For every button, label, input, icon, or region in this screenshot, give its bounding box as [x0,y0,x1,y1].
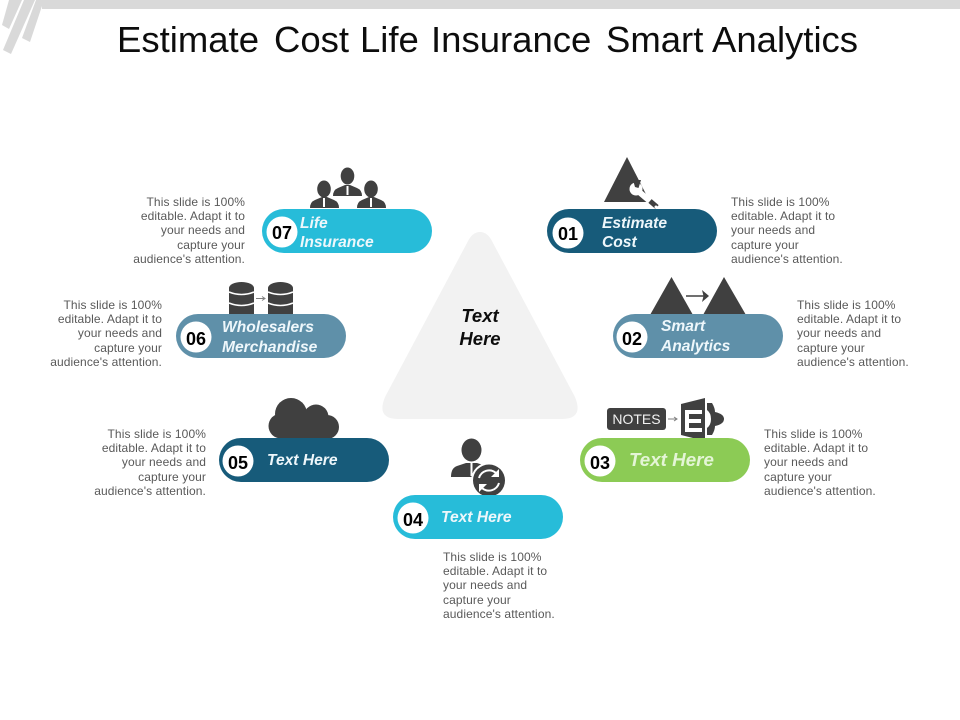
description: audience's attention. [764,484,876,498]
header bar decoration [2,0,960,54]
pill [219,438,389,482]
description: capture your [764,470,832,484]
description [764,427,876,498]
center text: Text [461,305,500,326]
description: your needs and [78,326,162,340]
number badge [266,216,298,248]
icon: databases with arrow [229,282,293,315]
icon: triangle with wrench [604,157,658,208]
item 01: 01 [558,224,578,244]
title: Insurance [431,19,591,60]
description: This slide is 100% [107,427,206,441]
center text [459,305,501,349]
number badge [398,502,428,534]
description: editable. Adapt it to [731,209,835,223]
item 06: Wholesalers Merchandise [50,282,346,369]
number badge [616,322,648,352]
pill label: Text Here [629,449,714,470]
description: audience's attention. [50,355,162,369]
description: This slide is 100% [731,195,830,209]
pill [580,438,750,482]
title: Life [360,19,419,60]
pill label: Wholesalers [222,319,314,336]
description: This slide is 100% [764,427,863,441]
pill [613,314,783,358]
title: Smart [606,19,703,60]
item 02 [613,277,909,369]
description [443,550,555,621]
description [731,195,843,266]
description: your needs and [731,223,815,237]
description [50,298,162,369]
description: editable. Adapt it to [102,441,206,455]
description: audience's attention. [443,607,555,621]
title: Estimate [117,19,259,60]
description: your needs and [443,578,527,592]
pill [393,495,563,539]
description: audience's attention. [731,252,843,266]
description: capture your [797,341,865,355]
number badge [584,446,616,476]
number badge [180,322,212,352]
description: editable. Adapt it to [764,441,868,455]
description: capture your [138,470,206,484]
item 02: Analytics [660,338,731,355]
pill label: Smart [661,318,706,335]
description [133,195,245,266]
pill [176,314,346,358]
description: This slide is 100% [146,195,245,209]
item 05 [94,398,389,498]
item 07: Life Insurance [133,168,432,266]
description: capture your [94,341,162,355]
icon: person with refresh [451,438,507,498]
description: This slide is 100% [797,298,896,312]
description: editable. Adapt it to [58,312,162,326]
number badge [552,218,584,248]
center text: Here [459,328,501,349]
item 06: Wholesalers Merchandise: 06 [186,329,206,349]
pill label: Text Here [441,509,512,526]
description: your needs and [122,455,206,469]
description: This slide is 100% [443,550,542,564]
description: capture your [443,593,511,607]
icon: three business people [310,168,386,208]
title: Analytics [712,19,858,60]
description: your needs and [797,326,881,340]
description: capture your [731,238,799,252]
item 06: Wholesalers Merchandise: Merchandise [222,339,318,356]
icon: notes to exchange logo: NOTES [612,411,661,427]
icon: two triangles with arrow [650,277,746,315]
icon: notes to exchange logo [607,398,724,441]
description: audience's attention. [797,355,909,369]
title: Cost [274,19,349,60]
description [94,427,206,498]
center triangle [382,232,578,419]
description [797,298,909,369]
description: This slide is 100% [63,298,162,312]
pill [547,209,717,253]
item 03 [580,398,876,498]
description: your needs and [161,223,245,237]
pill label: Text Here [267,452,338,469]
item 02: 02 [622,329,642,349]
pill label: Life [300,215,328,232]
item 03: 03 [590,453,610,473]
description: editable. Adapt it to [797,312,901,326]
item 01 [547,157,843,266]
item 01: Cost [602,234,637,251]
icon: cloud [268,398,339,440]
description: your needs and [764,455,848,469]
item 04: 04 [403,510,423,530]
description: capture your [177,238,245,252]
description: audience's attention. [133,252,245,266]
description: audience's attention. [94,484,206,498]
item 07: Life Insurance: 07 [272,223,292,243]
pill label: Estimate [602,215,667,232]
description: editable. Adapt it to [141,209,245,223]
number badge [222,446,254,476]
pill [262,209,432,253]
item 05: 05 [228,453,248,473]
description: editable. Adapt it to [443,564,547,578]
item 04 [393,438,563,621]
item 07: Life Insurance: Insurance [300,234,374,251]
